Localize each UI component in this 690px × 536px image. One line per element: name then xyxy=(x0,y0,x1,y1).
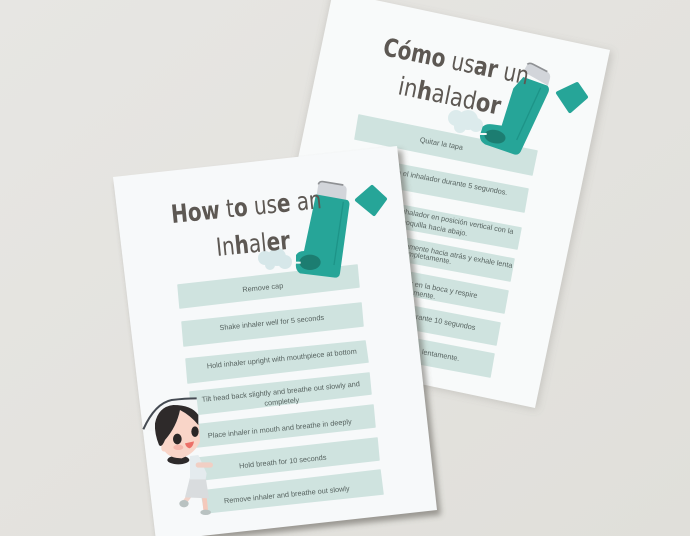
Spanish step text: Aguante la respiración durante 10 segundos xyxy=(334,297,477,332)
icon: vapor cloud (English card) xyxy=(258,248,292,270)
English step text: Tilt head back slightly and breathe out slowly and xyxy=(201,379,360,404)
panel: English card xyxy=(113,146,441,536)
Spanish step text xyxy=(334,135,515,363)
icon: inhaler cap (Spanish card) xyxy=(558,84,586,111)
Spanish step text: Quitar la tapa xyxy=(419,135,465,152)
Spanish step text: Mantener el inhalador en posición vertical con la xyxy=(359,199,515,236)
nurse arm xyxy=(198,457,210,473)
panel: Spanish card xyxy=(258,0,613,410)
nurse eyes xyxy=(173,434,182,444)
English title: Inhaler xyxy=(215,226,292,262)
nurse face xyxy=(161,410,200,458)
English step text: Shake inhaler well for 5 seconds xyxy=(219,313,325,332)
English step text xyxy=(201,281,360,505)
English step bars xyxy=(178,265,383,513)
nurse cheeks xyxy=(173,445,183,450)
English step text: completely xyxy=(264,395,300,408)
English step text: Remove inhaler and breathe out slowly xyxy=(224,484,350,505)
Spanish title: inhalador xyxy=(396,71,504,121)
nurse hair xyxy=(155,405,198,446)
nurse mouth xyxy=(185,441,194,448)
English title xyxy=(170,185,323,262)
Spanish title: Cómo usar un xyxy=(381,32,532,90)
icon: nurse character xyxy=(143,398,211,515)
Spanish step text: Retire y exhale lentamente. xyxy=(371,338,460,363)
English step text: Hold breath for 10 seconds xyxy=(239,453,327,470)
English step text: Hold inhaler upright with mouthpiece at bottom xyxy=(206,347,357,370)
Spanish step text: y completamente. xyxy=(394,247,452,266)
Spanish step text: Incline ligeramente hacia atrás y exhale lenta xyxy=(368,235,514,270)
icon: inhaler cap (English card) xyxy=(357,187,385,214)
English step text: Place inhaler in mouth and breathe in deeply xyxy=(207,417,352,440)
English step text: Remove cap xyxy=(242,281,284,294)
Spanish title xyxy=(381,32,532,121)
Spanish step text: Coloque el inhalador en la boca y respire xyxy=(346,267,478,300)
Spanish step bars xyxy=(312,115,537,377)
Spanish step text: Agitar bien el inhalador durante 5 segundos. xyxy=(366,162,508,197)
nurse legs and feet xyxy=(184,495,190,503)
nurse hair bun xyxy=(167,456,189,464)
icon: inhaler (English card) xyxy=(295,182,349,278)
icon: vapor cloud (Spanish card) xyxy=(448,110,483,133)
icon: inhaler (Spanish card) xyxy=(479,63,550,155)
nurse dress xyxy=(185,477,209,498)
nurse cap xyxy=(143,398,198,440)
English title: How to use an xyxy=(170,185,323,229)
Spanish step text: boquilla hacia abajo. xyxy=(401,217,468,238)
Spanish step text: profundamente. xyxy=(384,283,436,301)
